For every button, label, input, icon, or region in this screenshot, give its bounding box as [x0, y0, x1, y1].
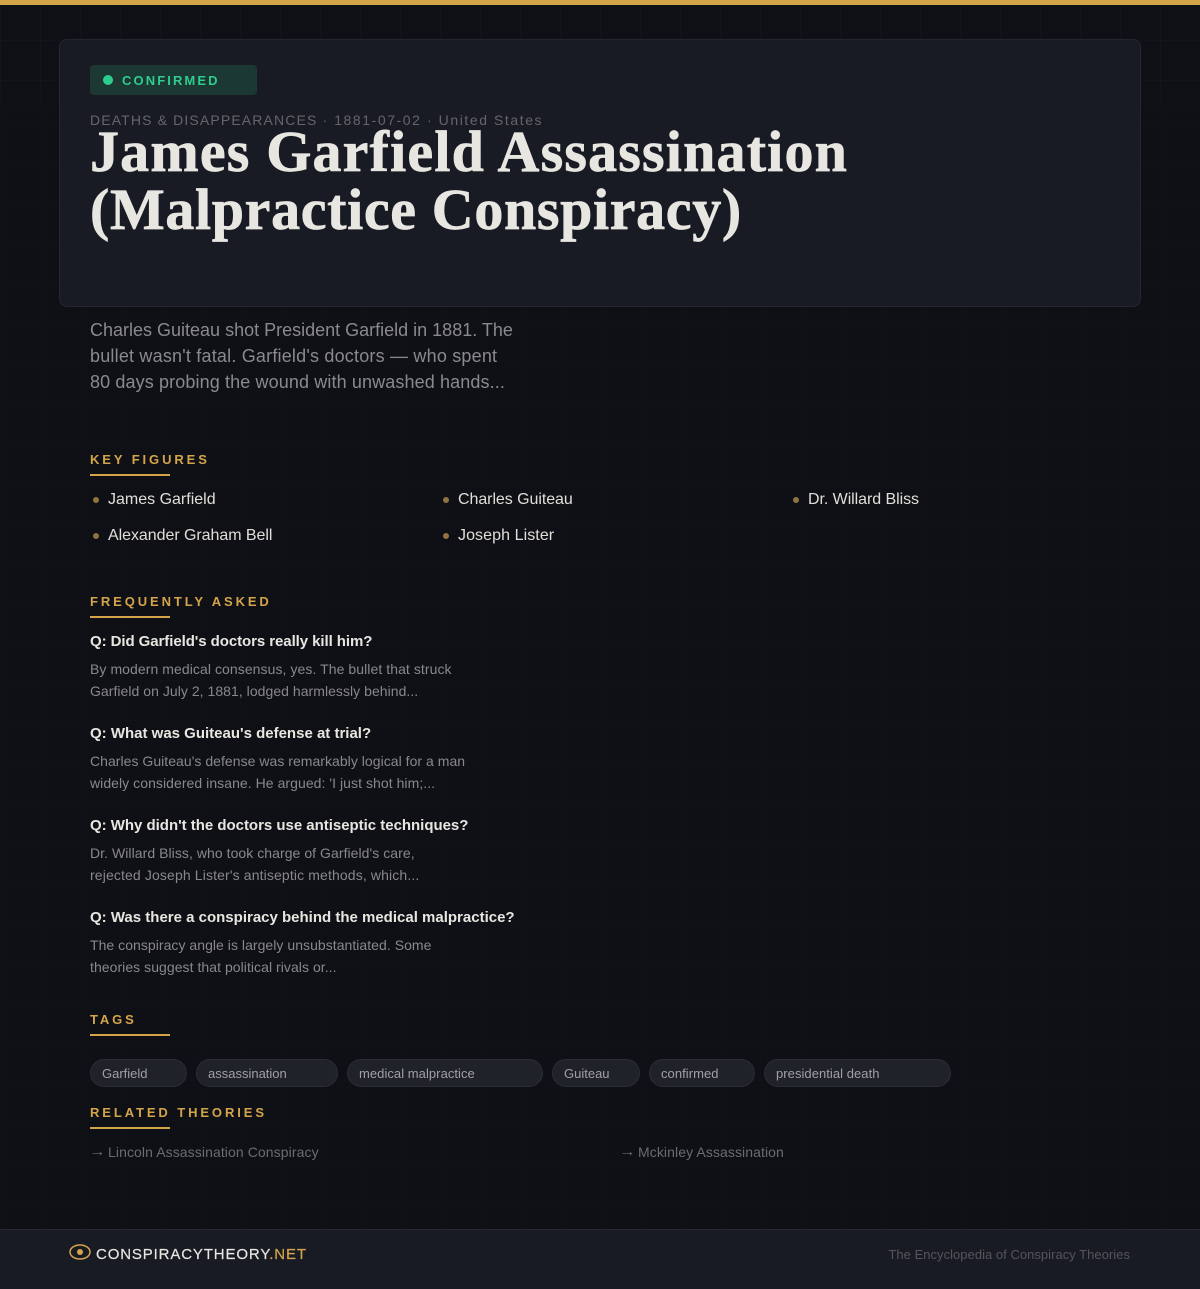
related link: Lincoln: →: [89, 1143, 106, 1159]
faq answer 2: Charles Guiteau's defense was remarkably logical for a man: [90, 753, 465, 769]
badge dot: [103, 75, 113, 85]
top accent bar: [0, 0, 1200, 5]
tag: assassination: assassination: [208, 1066, 287, 1081]
faq answer 1: By modern medical consensus, yes. The bullet that struck: [90, 661, 452, 677]
faq answer 4: The conspiracy angle is largely unsubstantiated. Some: [90, 937, 431, 953]
footer: [0, 1229, 1200, 1289]
heading: related theories: RELATED THEORIES: [90, 1105, 267, 1120]
faq answer 3: rejected Joseph Lister's antiseptic methods, which...: [90, 867, 419, 883]
summary text: [90, 320, 513, 392]
panel: header card: [59, 39, 1141, 307]
tag: Guiteau: [552, 1059, 640, 1087]
tag: Garfield: [90, 1059, 187, 1087]
tag: confirmed: confirmed: [661, 1066, 719, 1081]
tag row: [90, 1059, 951, 1087]
title: James Garfield Assassination: [90, 119, 848, 184]
heading: tags: TAGS: [90, 1012, 137, 1027]
faq answer 2: [90, 753, 465, 791]
status badge: confirmed: [90, 65, 257, 95]
figure: Charles Guiteau: Charles Guiteau: [458, 491, 573, 508]
key figures list: [93, 491, 919, 544]
faq question 2: Q: What was Guiteau's defense at trial?: [90, 725, 371, 742]
tag: presidential death: presidential death: [776, 1066, 880, 1081]
tag: medical malpractice: medical malpractice: [359, 1066, 475, 1081]
summary text: 80 days probing the wound with unwashed hands...: [90, 372, 505, 392]
faq answer 3: [90, 845, 419, 883]
title: (Malpractice Conspiracy): [90, 177, 742, 242]
icon: eye logo: [69, 1244, 91, 1260]
faq question 3: Q: Why didn't the doctors use antiseptic techniques?: [90, 817, 468, 834]
tag: Guiteau: Guiteau: [564, 1066, 610, 1081]
summary text: Charles Guiteau shot President Garfield in 1881. The: [90, 320, 513, 340]
summary text: bullet wasn't fatal. Garfield's doctors — who spent: [90, 346, 497, 366]
faq answer 2: widely considered insane. He argued: 'I just shot him;...: [90, 775, 435, 791]
figure: James Garfield: James Garfield: [108, 491, 216, 508]
faq answer 4: [90, 937, 431, 975]
tag: presidential death: [764, 1059, 951, 1087]
heading: frequently asked: FREQUENTLY ASKED: [90, 594, 272, 609]
tag: confirmed: [649, 1059, 755, 1087]
faq answer 1: [90, 661, 452, 699]
related link: McKinley: Mckinley Assassination: [638, 1144, 784, 1160]
tag: medical malpractice: [347, 1059, 543, 1087]
figure: Joseph Lister: Joseph Lister: [458, 527, 554, 544]
faq question 1: Q: Did Garfield's doctors really kill him?: [90, 633, 372, 650]
tag: assassination: [196, 1059, 338, 1087]
logo wordmark: CONSPIRACYTHEORY.NET: [96, 1246, 307, 1263]
faq question 4: Q: Was there a conspiracy behind the medical malpractice?: [90, 909, 515, 926]
badge label: CONFIRMED: [122, 73, 220, 88]
footer tagline: The Encyclopedia of Conspiracy Theories: [888, 1247, 1130, 1262]
category and date line: DEATHS & DISAPPEARANCES · 1881-07-02 · United States: [90, 112, 543, 128]
tag: Garfield: Garfield: [102, 1066, 148, 1081]
title: [90, 119, 848, 242]
figure: Alexander Graham Bell: Alexander Graham Bell: [108, 527, 272, 544]
faq answer 1: Garfield on July 2, 1881, lodged harmlessly behind...: [90, 683, 418, 699]
faq answer 4: theories suggest that political rivals or...: [90, 959, 337, 975]
related link: McKinley: →: [619, 1143, 636, 1159]
faq answer 3: Dr. Willard Bliss, who took charge of Garfield's care,: [90, 845, 415, 861]
heading: key figures: KEY FIGURES: [90, 452, 210, 467]
related link: Lincoln: Lincoln Assassination Conspiracy: [108, 1144, 319, 1160]
figure: Dr. Willard Bliss: Dr. Willard Bliss: [808, 491, 919, 508]
